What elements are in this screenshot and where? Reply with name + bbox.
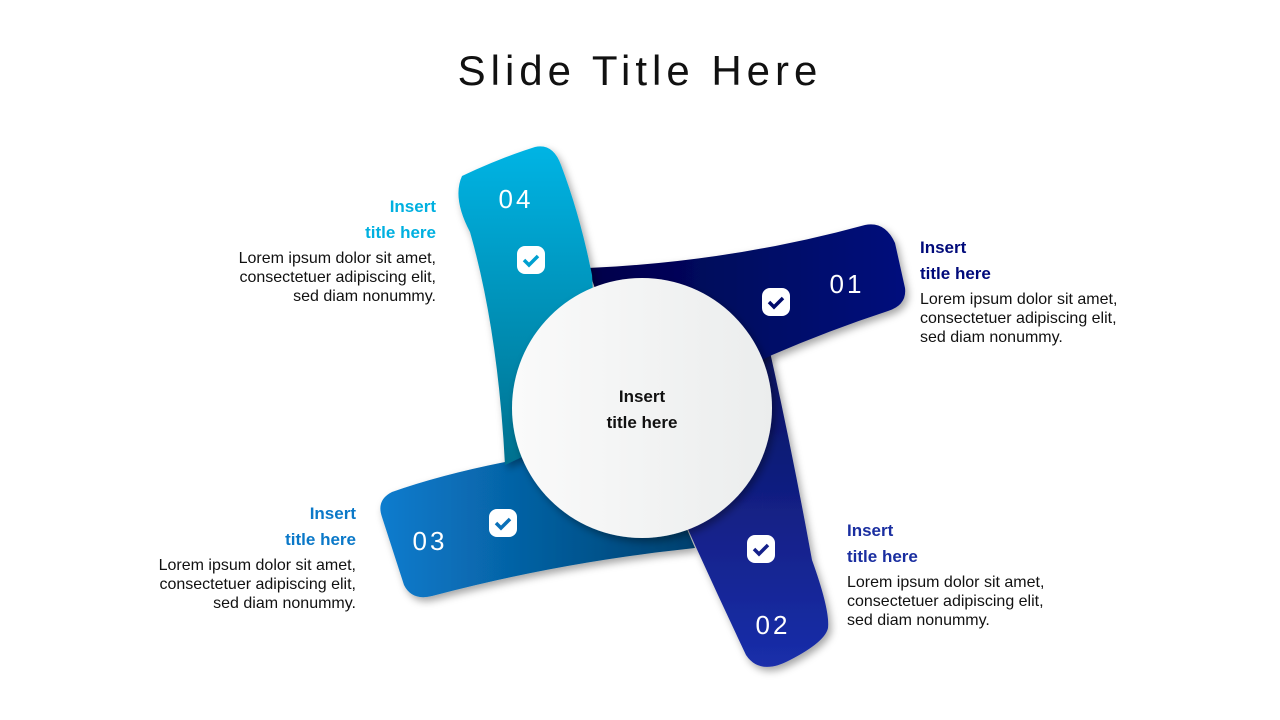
text block 03 bbox=[159, 504, 356, 612]
arm 01 bbox=[588, 224, 905, 420]
arm 02 bbox=[640, 352, 828, 667]
text block 02: Lorem ipsum dolor sit amet, bbox=[847, 574, 1044, 591]
text block 04: Lorem ipsum dolor sit amet, bbox=[239, 250, 436, 267]
center circle bbox=[512, 278, 772, 538]
text block 03: Lorem ipsum dolor sit amet, bbox=[159, 557, 356, 574]
text block 01: Insert bbox=[920, 238, 966, 257]
check icons bbox=[489, 246, 790, 563]
text block 04: title here bbox=[365, 223, 436, 242]
center text bbox=[607, 387, 677, 432]
text block 04 bbox=[239, 197, 436, 305]
text block 02: Insert bbox=[847, 521, 893, 540]
arm 04 bbox=[458, 146, 600, 465]
title: Slide Title Here bbox=[458, 47, 822, 94]
numbers: 04 bbox=[499, 184, 533, 214]
text block 01: sed diam nonummy. bbox=[920, 329, 1063, 346]
text block 04: sed diam nonummy. bbox=[293, 288, 436, 305]
text block 01: consectetuer adipiscing elit, bbox=[920, 310, 1117, 327]
text block 01 bbox=[920, 238, 1117, 346]
text block 01: title here bbox=[920, 264, 991, 283]
text block 02: sed diam nonummy. bbox=[847, 612, 990, 629]
numbers bbox=[413, 184, 864, 640]
arm 03 bbox=[380, 420, 695, 597]
text block 04: Insert bbox=[390, 197, 436, 216]
numbers: 03 bbox=[413, 526, 447, 556]
text block 01: Lorem ipsum dolor sit amet, bbox=[920, 291, 1117, 308]
text block 03: Insert bbox=[310, 504, 356, 523]
text block 02: title here bbox=[847, 547, 918, 566]
center text: title here bbox=[607, 413, 677, 432]
text block 03: sed diam nonummy. bbox=[213, 595, 356, 612]
numbers: 02 bbox=[756, 610, 790, 640]
text block 02: consectetuer adipiscing elit, bbox=[847, 593, 1044, 610]
text block 02 bbox=[847, 521, 1044, 629]
numbers: 01 bbox=[830, 269, 864, 299]
center text: Insert bbox=[619, 387, 665, 406]
text block 03: consectetuer adipiscing elit, bbox=[159, 576, 356, 593]
text block 04: consectetuer adipiscing elit, bbox=[239, 269, 436, 286]
text block 03: title here bbox=[285, 530, 356, 549]
